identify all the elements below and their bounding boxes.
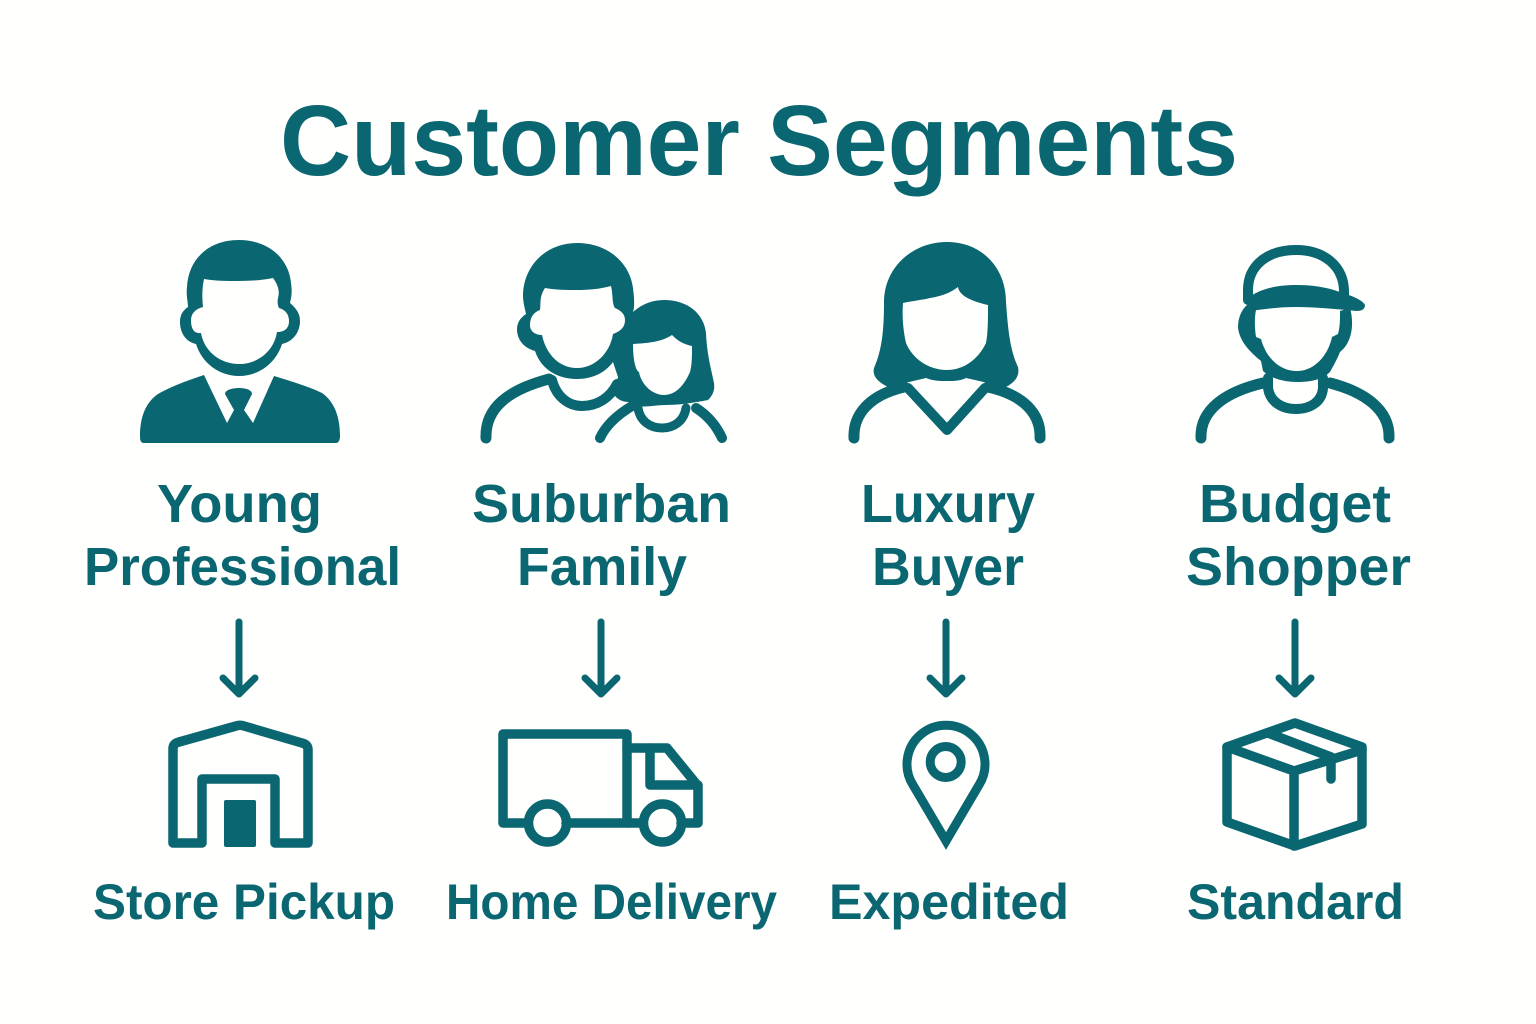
label: Store Pickup: Store Pickup — [93, 874, 395, 930]
label: Luxury Buyer: Luxury — [861, 474, 1035, 534]
icon: expedited location pin — [907, 725, 985, 841]
label: Suburban Family: Suburban — [472, 474, 731, 534]
label: Luxury Buyer — [861, 474, 1035, 597]
arrow: young professional to store pickup — [223, 622, 255, 694]
label: Luxury Buyer: Buyer — [872, 537, 1024, 597]
icon: store pickup warehouse — [173, 725, 308, 847]
label: Young Professional: Professional — [84, 537, 401, 597]
label: Suburban Family: Family — [517, 537, 687, 597]
arrow: suburban family to home delivery — [585, 622, 617, 694]
icon: luxury buyer — [854, 242, 1040, 438]
label: Young Professional — [84, 474, 401, 597]
icon: home delivery truck — [503, 734, 698, 842]
arrow: luxury buyer to expedited — [930, 622, 962, 694]
label: Expedited: Expedited — [829, 874, 1069, 930]
label: Suburban Family — [472, 474, 731, 597]
icon: suburban family — [486, 243, 722, 438]
title: Customer Segments — [280, 85, 1238, 197]
icon: budget shopper — [1201, 250, 1389, 438]
label: Standard: Standard — [1187, 874, 1404, 930]
icon: young professional — [140, 240, 340, 443]
label: Budget Shopper: Budget — [1199, 474, 1391, 534]
label: Budget Shopper — [1186, 474, 1411, 597]
label: Home Delivery: Home Delivery — [446, 874, 777, 930]
arrow: budget shopper to standard — [1279, 622, 1311, 694]
label: Budget Shopper: Shopper — [1186, 537, 1411, 597]
label: Young Professional: Young — [157, 474, 322, 534]
icon: standard package box — [1227, 723, 1362, 846]
